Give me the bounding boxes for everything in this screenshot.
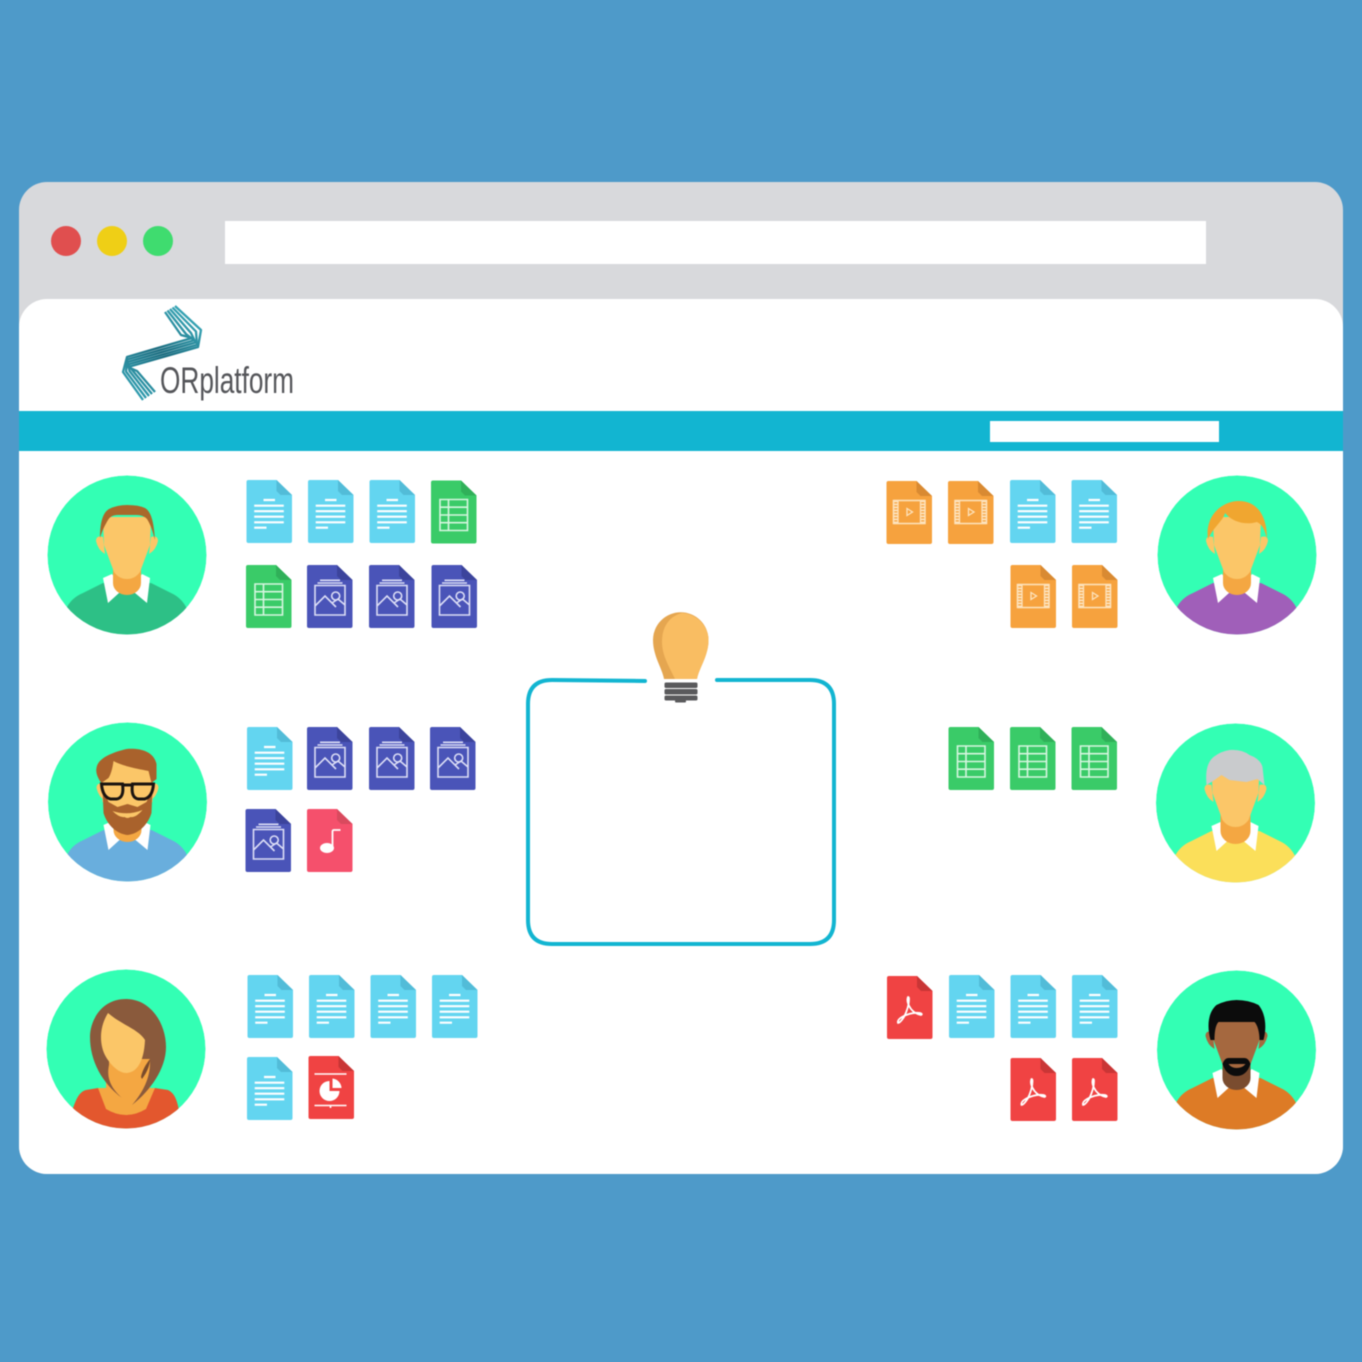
maximise button (143, 226, 173, 256)
avatar: woman with brown hair (46, 970, 206, 1139)
video file (948, 481, 994, 544)
file group: middle right (948, 727, 1117, 790)
text document (1010, 480, 1056, 543)
image file (430, 727, 476, 790)
bulb glass (653, 612, 708, 679)
bulb highlight (662, 613, 708, 679)
text document (1072, 975, 1118, 1038)
spreadsheet (431, 480, 476, 544)
search box (990, 421, 1219, 442)
avatar: blond man with purple sweater (1158, 476, 1316, 645)
address bar (225, 221, 1206, 264)
bulb base (664, 682, 698, 702)
text document (1072, 480, 1117, 543)
PDF file (887, 976, 932, 1039)
page area (19, 299, 1343, 1174)
browser toolbar (19, 182, 1343, 1174)
text document (949, 975, 994, 1038)
text document (308, 480, 354, 543)
music file (307, 809, 352, 872)
text document (1010, 975, 1056, 1038)
text document (248, 975, 293, 1038)
avatar: man with green sweater (48, 476, 206, 645)
video file (886, 481, 932, 544)
PDF file (1072, 1058, 1118, 1121)
spreadsheet (1072, 727, 1117, 790)
text document (247, 1057, 292, 1120)
file group: top left (246, 480, 477, 628)
image file (432, 565, 477, 628)
image file (369, 565, 414, 628)
logo wordmark: ORplatform (160, 360, 294, 401)
central frame with gap for bulb (528, 680, 834, 944)
text document (246, 480, 292, 543)
file group: middle left (246, 727, 476, 872)
image file (307, 727, 352, 790)
video file (1072, 565, 1118, 628)
avatar: bearded man with glasses (48, 722, 207, 892)
close button (51, 226, 81, 256)
spreadsheet (948, 727, 994, 790)
icon: light bulb (653, 612, 708, 702)
minimise button (97, 226, 127, 256)
video file (1010, 565, 1056, 628)
file group: top right (886, 480, 1118, 628)
navigation bar (19, 411, 1343, 451)
spreadsheet (246, 565, 292, 628)
text document (370, 480, 415, 543)
image file (369, 727, 414, 790)
file group: bottom right (887, 975, 1118, 1121)
text document (247, 727, 292, 790)
presentation file (308, 1056, 354, 1119)
image file (307, 565, 352, 628)
logo ribbon (123, 306, 201, 400)
logo: ORplatform (123, 306, 294, 401)
browser window (19, 182, 1343, 1174)
text document (309, 975, 354, 1038)
text document (432, 975, 478, 1038)
text document (370, 975, 416, 1038)
file group: bottom left (247, 975, 478, 1120)
avatar: dark-skinned man with goatee (1157, 970, 1316, 1140)
spreadsheet (1010, 727, 1056, 790)
image file (246, 809, 291, 872)
PDF file (1010, 1058, 1056, 1121)
avatar: grey-haired man with yellow sweater (1156, 724, 1315, 893)
